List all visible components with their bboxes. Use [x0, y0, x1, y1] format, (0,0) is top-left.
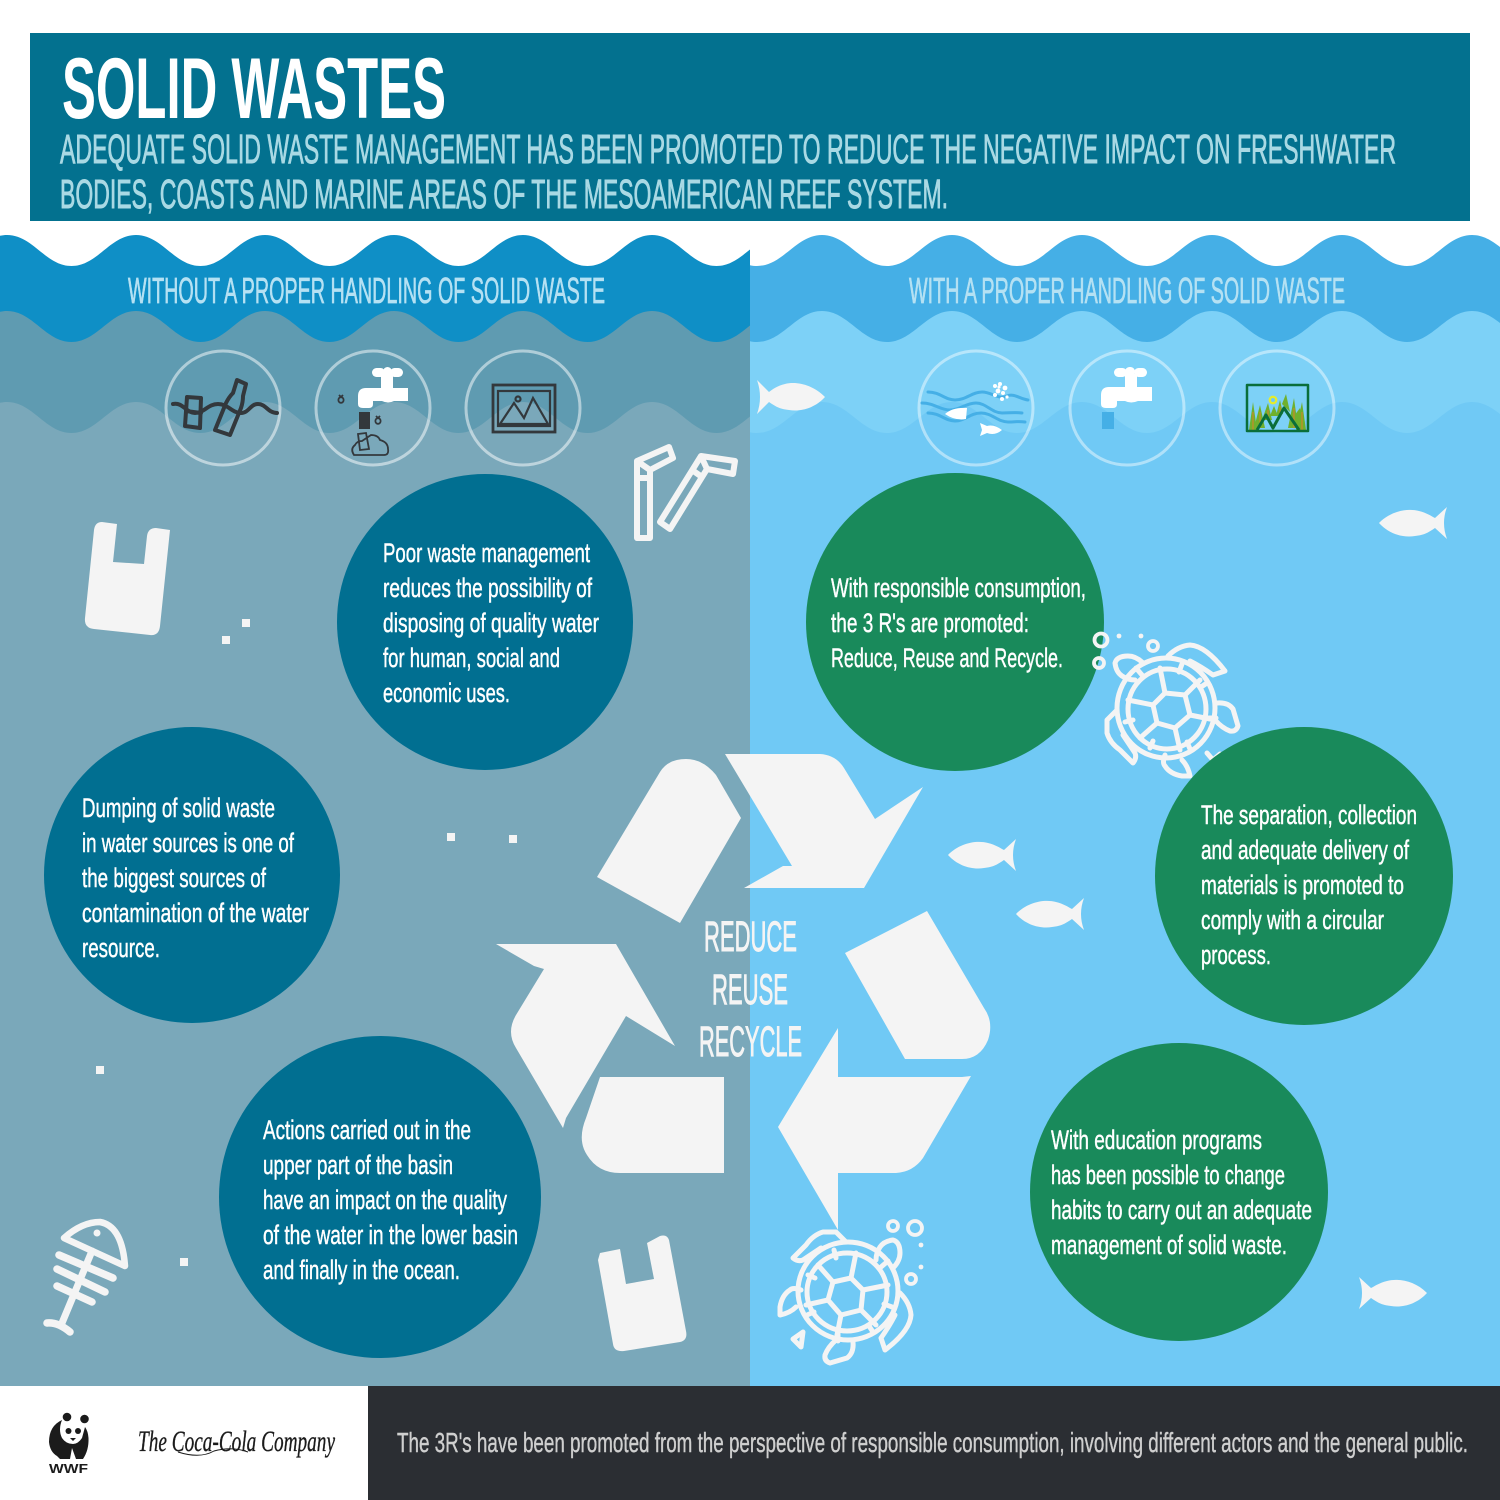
callout: upper basin actions: and finally in the ocean. — [263, 1255, 460, 1285]
icon: healthy forest picture — [1220, 351, 1334, 465]
icon: fish skeleton — [47, 1222, 125, 1332]
callout: education programs — [1030, 1043, 1328, 1341]
callout: separation and collection: The separation, collection — [1201, 800, 1417, 830]
callout: poor waste management: economic uses. — [383, 678, 510, 708]
callout: responsible consumption — [806, 473, 1104, 771]
callout: separation and collection: materials is promoted to — [1201, 870, 1404, 900]
icon: plastic bag bottom — [598, 1236, 686, 1351]
arrow segment: bottom left tab — [582, 1077, 724, 1173]
panel: left water background — [0, 235, 781, 1400]
callout: dumping of solid waste — [44, 727, 340, 1023]
logo: WWF panda — [49, 1413, 89, 1476]
subtitle — [60, 126, 1396, 217]
callout: poor waste management: for human, social and — [383, 643, 560, 673]
title: SOLID WASTES — [62, 41, 446, 137]
callout: upper basin actions: have an impact on the quality — [263, 1185, 507, 1215]
callout: dumping of solid waste: in water sources is one of — [82, 828, 294, 858]
icon: trash pile — [352, 433, 388, 455]
callout: responsible consumption: Reduce, Reuse and Recycle. — [831, 643, 1063, 673]
callout: separation and collection: and adequate delivery of — [1201, 835, 1409, 865]
heading: without proper handling: WITHOUT A PROPER HANDLING OF SOLID WASTE — [128, 270, 605, 311]
icon: clean tap — [1070, 351, 1184, 465]
callout: poor waste management: disposing of quality water — [383, 608, 599, 638]
logo: WWF panda: WWF — [49, 1462, 88, 1476]
recycling text: RECYCLE — [699, 1018, 802, 1066]
arrow segment: top right head — [725, 754, 923, 888]
callout: education programs: With education programs — [1051, 1125, 1262, 1155]
panel: right water background — [750, 235, 1500, 1386]
icon: plastic bag top left — [85, 522, 170, 635]
icon: polluted water with bottles — [166, 351, 280, 465]
recycling text: REUSE — [712, 966, 788, 1014]
icon: turtle top right — [1107, 645, 1238, 776]
callout: education programs: habits to carry out an adequate — [1051, 1195, 1312, 1225]
callout: responsible consumption: With responsible consumption, — [831, 573, 1086, 603]
callout: upper basin actions — [219, 1036, 541, 1358]
callout: separation and collection: process. — [1201, 940, 1271, 970]
callout: poor waste management — [337, 474, 633, 770]
logo panel — [0, 1386, 368, 1500]
arrow segment: left head — [496, 944, 675, 1128]
callout: separation and collection — [1155, 727, 1453, 1025]
icon: straws — [637, 447, 735, 538]
icon: clean water with fish — [919, 351, 1033, 465]
logo: The Coca-Cola Company — [138, 1425, 335, 1458]
icon: fish bottom right — [1359, 1277, 1427, 1309]
header banner — [30, 33, 1470, 221]
icon: fish top right — [1379, 507, 1447, 539]
callout: education programs: has been possible to change — [1051, 1160, 1285, 1190]
callout: dumping of solid waste: Dumping of solid waste — [82, 793, 275, 823]
bubbles: turtle bottom — [888, 1221, 923, 1284]
icon: turtle bottom — [780, 1232, 911, 1363]
callout: poor waste management: Poor waste management — [383, 538, 590, 568]
icon: fish middle — [948, 839, 1016, 871]
callout: upper basin actions: of the water in the lower basin — [263, 1220, 518, 1250]
icon: fish lower middle — [1016, 898, 1084, 930]
arrow segment: right tab — [845, 911, 990, 1059]
callout: dumping of solid waste: contamination of the water — [82, 898, 309, 928]
recycling text — [699, 913, 802, 1066]
recycling symbol — [496, 754, 990, 1230]
callout: separation and collection: comply with a circular — [1201, 905, 1384, 935]
icon: bugs — [338, 395, 381, 424]
callout: dumping of solid waste: resource. — [82, 933, 160, 963]
callout: poor waste management: reduces the possibility of — [383, 573, 592, 603]
icon: dead landscape picture — [466, 351, 580, 465]
logo: The Coca-Cola Company: The Coca-Cola Company — [138, 1425, 335, 1458]
small debris squares — [96, 619, 517, 1266]
arrow segment: top left tab — [597, 759, 741, 923]
callout: responsible consumption: the 3 R's are promoted: — [831, 608, 1029, 638]
icon: fish top centre — [757, 380, 825, 414]
callout: upper basin actions: upper part of the basin — [263, 1150, 453, 1180]
arrow segment: bottom right head — [778, 1028, 971, 1230]
icon: polluted tap — [316, 351, 430, 465]
callout: education programs: management of solid waste. — [1051, 1230, 1287, 1260]
callout: upper basin actions: Actions carried out in the — [263, 1115, 471, 1145]
footer bar — [368, 1386, 1500, 1500]
bubbles: turtle top right — [1094, 634, 1158, 668]
callout: dumping of solid waste: the biggest sources of — [82, 863, 266, 893]
recycling text: REDUCE — [704, 913, 797, 961]
